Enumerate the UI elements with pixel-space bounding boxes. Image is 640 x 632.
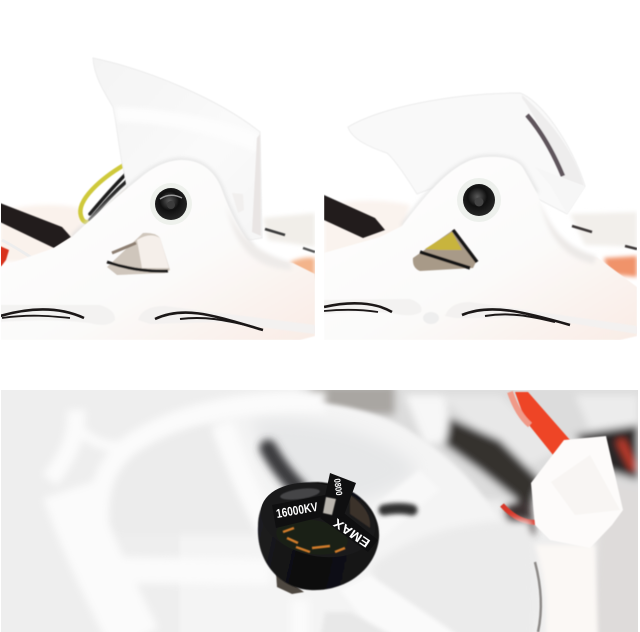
triangular window (413, 230, 477, 271)
panel: canopy tilted up, left photo (0, 58, 315, 340)
frame body (0, 160, 315, 340)
propeller guards behind left (0, 205, 315, 278)
white wire sleeve (535, 545, 598, 632)
coil recess (274, 515, 350, 559)
triangular window (107, 233, 170, 275)
frame body (324, 157, 637, 340)
frame body shadow (402, 157, 537, 226)
red power wires (510, 392, 570, 455)
spoke, upper right of motor (375, 470, 440, 540)
tab on canopy (233, 194, 243, 212)
background (1, 390, 638, 632)
black arm left, 16000KV (272, 494, 342, 528)
red wire at left edge (0, 246, 9, 268)
motor with labels (254, 473, 382, 594)
canopy lower band (535, 167, 585, 214)
wires: yellow and black (80, 165, 128, 222)
label: 16000KV: 16000KV (275, 500, 319, 521)
upper vent (279, 486, 321, 502)
center tab (424, 312, 438, 324)
panel: motor close-up, bottom photo (1, 385, 640, 632)
blurred black wire behind motor (268, 448, 300, 490)
right vent (350, 495, 370, 528)
white cable left (2, 240, 32, 258)
black arm right, EMAX (320, 506, 378, 552)
panel: canopy tilted forward, right photo (324, 93, 637, 340)
motor shaft (323, 497, 336, 515)
black heat-shrink tube (324, 195, 385, 238)
frame loops with black wires (324, 299, 637, 334)
screw with washer (150, 183, 192, 225)
inner window panel below spoke (320, 612, 400, 632)
fin fold shading (115, 107, 258, 152)
motor top face (254, 473, 382, 567)
body soft shading (232, 220, 290, 268)
white connector (531, 436, 623, 548)
fin side slit (252, 134, 261, 236)
motor housing (258, 482, 379, 590)
screw with washer (457, 178, 501, 222)
frame loops with black wires (0, 305, 315, 334)
black heat-shrink tube (0, 203, 71, 248)
propeller guards behind right (324, 200, 637, 277)
canopy fin (93, 58, 262, 240)
frame body shadow (68, 158, 246, 238)
label: EMAX: EMAX (330, 515, 373, 550)
prop shadow strokes (572, 226, 637, 249)
spoke, lower right of motor (340, 575, 465, 632)
label: 0800: 0800 (332, 478, 344, 496)
silver edge of frame (535, 562, 541, 632)
left ring of guard (50, 401, 325, 632)
prop shadows right (265, 229, 315, 252)
red wire loop (502, 505, 540, 522)
black tab with 0800 (322, 473, 356, 518)
motor mounting stud (276, 572, 304, 594)
canopy shell (348, 93, 585, 214)
copper windings (283, 528, 345, 552)
body soft shading (546, 215, 596, 262)
guard window left (105, 421, 262, 535)
large white propeller guard disc (298, 401, 486, 506)
camera opening (522, 95, 584, 186)
guard window lower (372, 520, 536, 632)
guard window upper (259, 422, 410, 498)
dark stub right of motor (384, 508, 412, 510)
blurred electronics, top right (300, 385, 640, 632)
